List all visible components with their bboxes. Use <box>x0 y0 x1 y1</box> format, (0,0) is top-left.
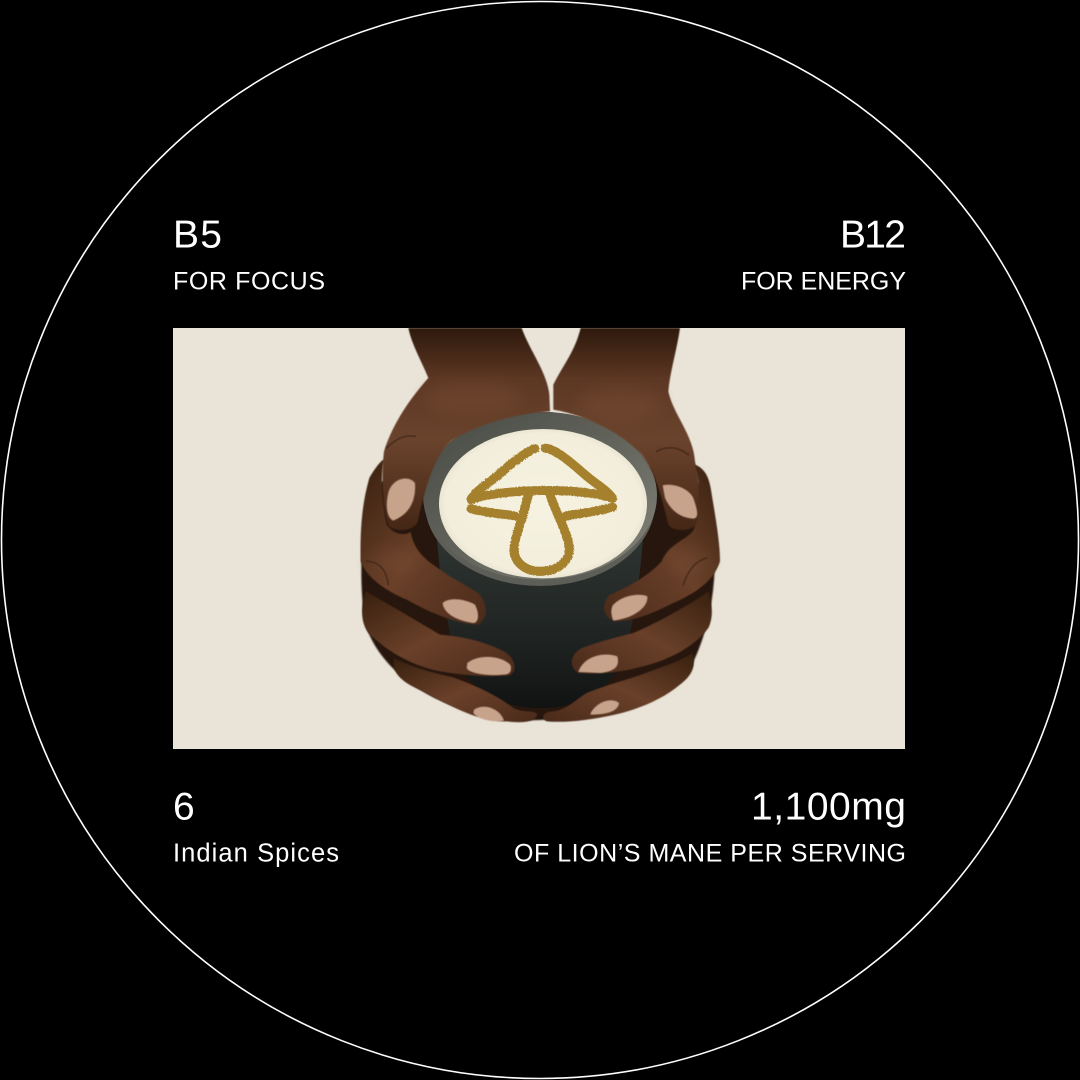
left hand: wrist and thumb <box>383 328 550 530</box>
photo: hands holding a latte cup with a mushroom drawn in spice <box>173 328 905 749</box>
skin highlights <box>370 381 710 575</box>
photo background <box>173 328 905 749</box>
stat: B5 for focus <box>173 214 325 296</box>
stat: B12 for energy: B12 <box>840 214 906 256</box>
stat: B12 for energy <box>741 214 906 296</box>
stat: B12 for energy: FOR ENERGY <box>741 268 906 296</box>
cup body <box>437 535 643 708</box>
knuckle creases <box>367 436 707 585</box>
right hand: index finger <box>604 465 720 621</box>
cup bevel below the rim <box>425 418 655 586</box>
cup rim <box>423 412 657 580</box>
stat: B5 for focus: B5 <box>173 214 222 256</box>
left hand: middle finger <box>362 591 515 676</box>
hands and cup <box>361 328 720 722</box>
stat: 6 Indian spices: Indian Spices <box>173 840 339 868</box>
right hand: wrist and thumb <box>553 328 700 530</box>
milk foam surface <box>439 429 647 578</box>
mushroom icon in spice <box>471 448 613 571</box>
stat: B5 for focus: FOR FOCUS <box>173 268 325 296</box>
right hand: middle finger <box>572 591 712 674</box>
dark gaps between the fingers <box>361 455 715 720</box>
right hand: ring finger <box>543 653 694 722</box>
left hand: ring finger <box>393 658 537 722</box>
stat: 1,100mg of lion's mane per serving <box>514 786 906 868</box>
stat: 6 Indian spices <box>173 786 339 868</box>
left hand: index finger <box>361 460 486 625</box>
stat: 6 Indian spices: 6 <box>173 786 195 828</box>
fingernails <box>387 478 697 721</box>
stat: 1,100mg of lion's mane per serving: OF LION’S MANE PER SERVING <box>514 840 906 868</box>
stat: 1,100mg of lion's mane per serving: 1,100mg <box>751 786 906 828</box>
